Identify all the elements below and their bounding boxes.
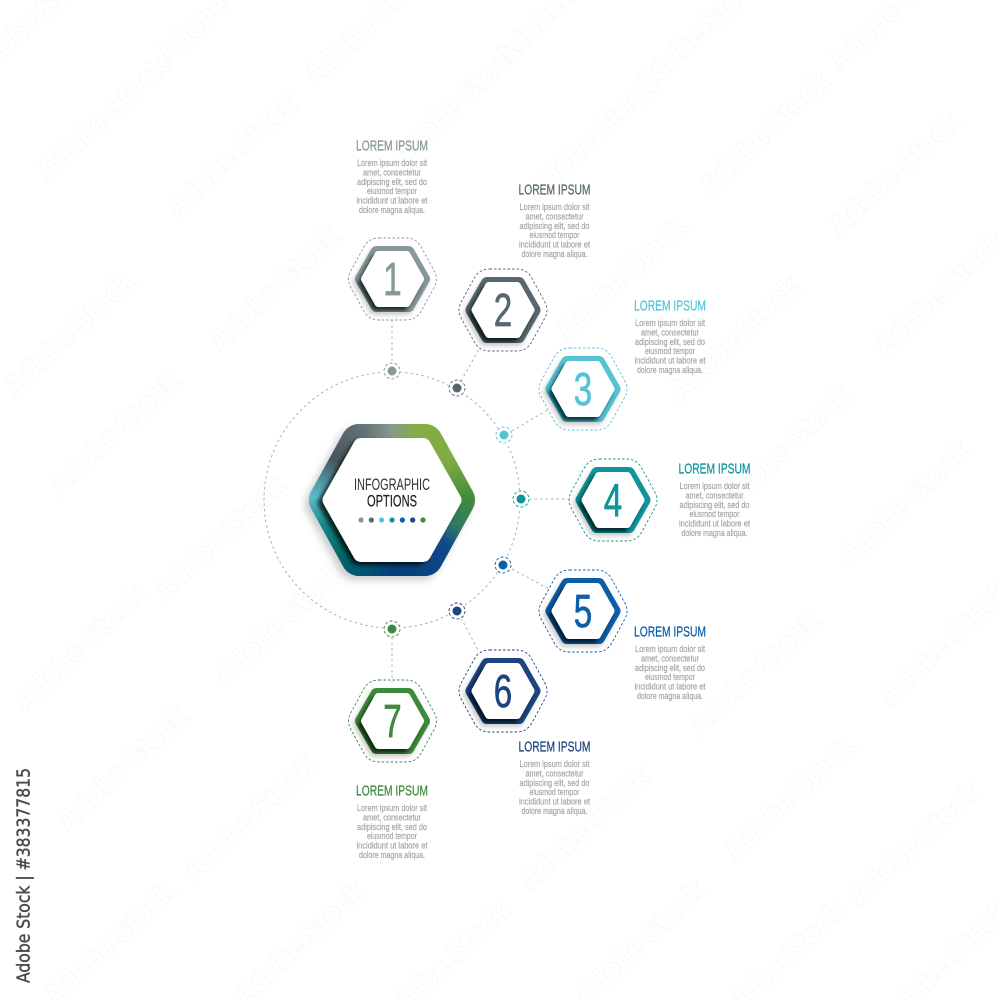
node dot 1 (383, 362, 401, 380)
text block 1: incididunt ut labore et (356, 196, 428, 206)
hexagon 4: 4 (604, 476, 622, 526)
watermark: Adobe Stock (683, 606, 825, 741)
hexagon 7 (348, 680, 436, 762)
hexagon 1 (348, 238, 436, 320)
watermark: Adobe Stock (160, 88, 302, 223)
text block 2: dolore magna aliqua. (522, 249, 588, 259)
text block 1: amet, consectetur (363, 167, 421, 177)
text block 3: eiusmod tempor (645, 346, 695, 356)
text block 7: eiusmod tempor (367, 831, 417, 841)
hexagon 3 (539, 348, 627, 430)
text block 6: amet, consectetur (526, 768, 584, 778)
text block 2 (518, 182, 590, 259)
text block 7: incididunt ut labore et (356, 841, 428, 851)
text block 5: eiusmod tempor (645, 672, 695, 682)
text block 3 (634, 298, 706, 375)
text block 7 (356, 782, 428, 860)
hexagon 3: 3 (574, 365, 592, 415)
text block 4: Lorem ipsum dolor sit (680, 481, 750, 491)
hexagon 6 (459, 650, 547, 732)
text block 1: Lorem ipsum dolor sit (357, 158, 427, 168)
text block 1: eiusmod tempor (367, 186, 417, 196)
watermark: Adobe Stock (178, 751, 320, 886)
watermark: Adobe Stock (823, 106, 965, 241)
text block 3: amet, consectetur (641, 327, 699, 337)
text block 4: LOREM IPSUM (678, 460, 750, 478)
text block 5: Lorem ipsum dolor sit (635, 644, 705, 654)
central title (354, 475, 430, 510)
node dot 2 (448, 379, 466, 397)
text block 2: incididunt ut labore et (519, 240, 590, 250)
text block 4: adipiscing elit, sed do (680, 500, 750, 510)
text block 5 (634, 624, 706, 701)
watermark: Adobe Stock (208, 556, 350, 691)
text block 7: LOREM IPSUM (356, 782, 428, 800)
text block 4: eiusmod tempor (690, 509, 740, 519)
text block 3: adipiscing elit, sed do (635, 337, 705, 347)
watermark: Adobe Stock (43, 366, 185, 501)
watermark: Adobe Stock (51, 701, 193, 836)
hexagon 2 (459, 269, 547, 351)
text block 6: adipiscing elit, sed do (520, 778, 590, 788)
text block 6: eiusmod tempor (530, 787, 580, 797)
text block 3: LOREM IPSUM (634, 298, 706, 314)
hexagon 6: 6 (494, 667, 512, 717)
text block 6: LOREM IPSUM (518, 738, 590, 756)
text block 3: dolore magna aliqua. (637, 365, 703, 375)
watermark: Adobe Stock (0, 266, 140, 401)
text block 7: adipiscing elit, sed do (357, 822, 427, 832)
watermark: Adobe Stock (520, 71, 662, 206)
hexagon 4 (569, 459, 657, 541)
text block 6 (518, 738, 590, 816)
text block 1: LOREM IPSUM (356, 138, 428, 154)
text block 4: amet, consectetur (686, 490, 744, 500)
text block 4 (678, 460, 750, 538)
watermark: Adobe Stock (8, 581, 150, 716)
watermark: Adobe Stock (203, 221, 345, 356)
hexagon 5 (539, 570, 627, 652)
text block 1: dolore magna aliqua. (359, 205, 425, 215)
text block 1 (356, 138, 428, 215)
text block 4: incididunt ut labore et (679, 519, 750, 529)
watermark: Adobe Stock (31, 51, 173, 186)
central hexagon (302, 424, 475, 584)
hexagon 7: 7 (383, 697, 402, 747)
text block 5: amet, consectetur (641, 653, 699, 663)
hexagon 5: 5 (574, 587, 592, 637)
watermark: Adobe Stock (693, 66, 835, 201)
central title: OPTIONS (367, 492, 417, 510)
watermark: Adobe Stock (513, 761, 655, 896)
node dot 7 (383, 620, 401, 638)
text block 5: LOREM IPSUM (634, 624, 706, 640)
text block 5: incididunt ut labore et (634, 682, 706, 692)
text block 7: amet, consectetur (363, 812, 421, 822)
text block 7: dolore magna aliqua. (359, 850, 425, 860)
text block 5: dolore magna aliqua. (637, 691, 703, 701)
text block 2: Lorem ipsum dolor sit (520, 202, 590, 212)
node dot 3 (495, 426, 513, 444)
hexagon 2: 2 (494, 286, 512, 336)
node dot 6 (448, 602, 466, 620)
text block 7: Lorem ipsum dolor sit (357, 803, 427, 813)
node dot 5 (494, 556, 512, 574)
dashed circle and connectors (264, 320, 570, 682)
hexagon 1: 1 (383, 255, 402, 305)
text block 5: adipiscing elit, sed do (635, 663, 705, 673)
text block 6: incididunt ut labore et (519, 797, 590, 807)
text block 2: amet, consectetur (526, 211, 584, 221)
watermark: Adobe Stock (843, 776, 985, 911)
central colour dots (358, 517, 426, 523)
text block 4: dolore magna aliqua. (682, 528, 748, 538)
watermark: Adobe Stock (663, 271, 805, 406)
text block 2: adipiscing elit, sed do (520, 221, 590, 231)
watermark: Adobe Stock (385, 36, 527, 171)
watermark: Adobe Stock (833, 436, 975, 571)
watermark: Adobe Stock (718, 731, 860, 866)
text block 3: Lorem ipsum dolor sit (635, 318, 705, 328)
text block 6: dolore magna aliqua. (522, 806, 588, 816)
text block 6: Lorem ipsum dolor sit (520, 759, 590, 769)
text block 3: incididunt ut labore et (634, 356, 706, 366)
text block 2: LOREM IPSUM (518, 182, 590, 198)
watermark: Adobe Stock (148, 471, 290, 606)
watermark: Adobe Stock (550, 211, 692, 346)
stock credit: Adobe Stock | #383377815 (14, 768, 34, 983)
central title: INFOGRAPHIC (354, 475, 430, 494)
text block 1: adipiscing elit, sed do (357, 177, 427, 187)
text block 2: eiusmod tempor (530, 230, 580, 240)
node dot 4 (512, 490, 530, 508)
watermark: Adobe Stock (713, 381, 855, 516)
